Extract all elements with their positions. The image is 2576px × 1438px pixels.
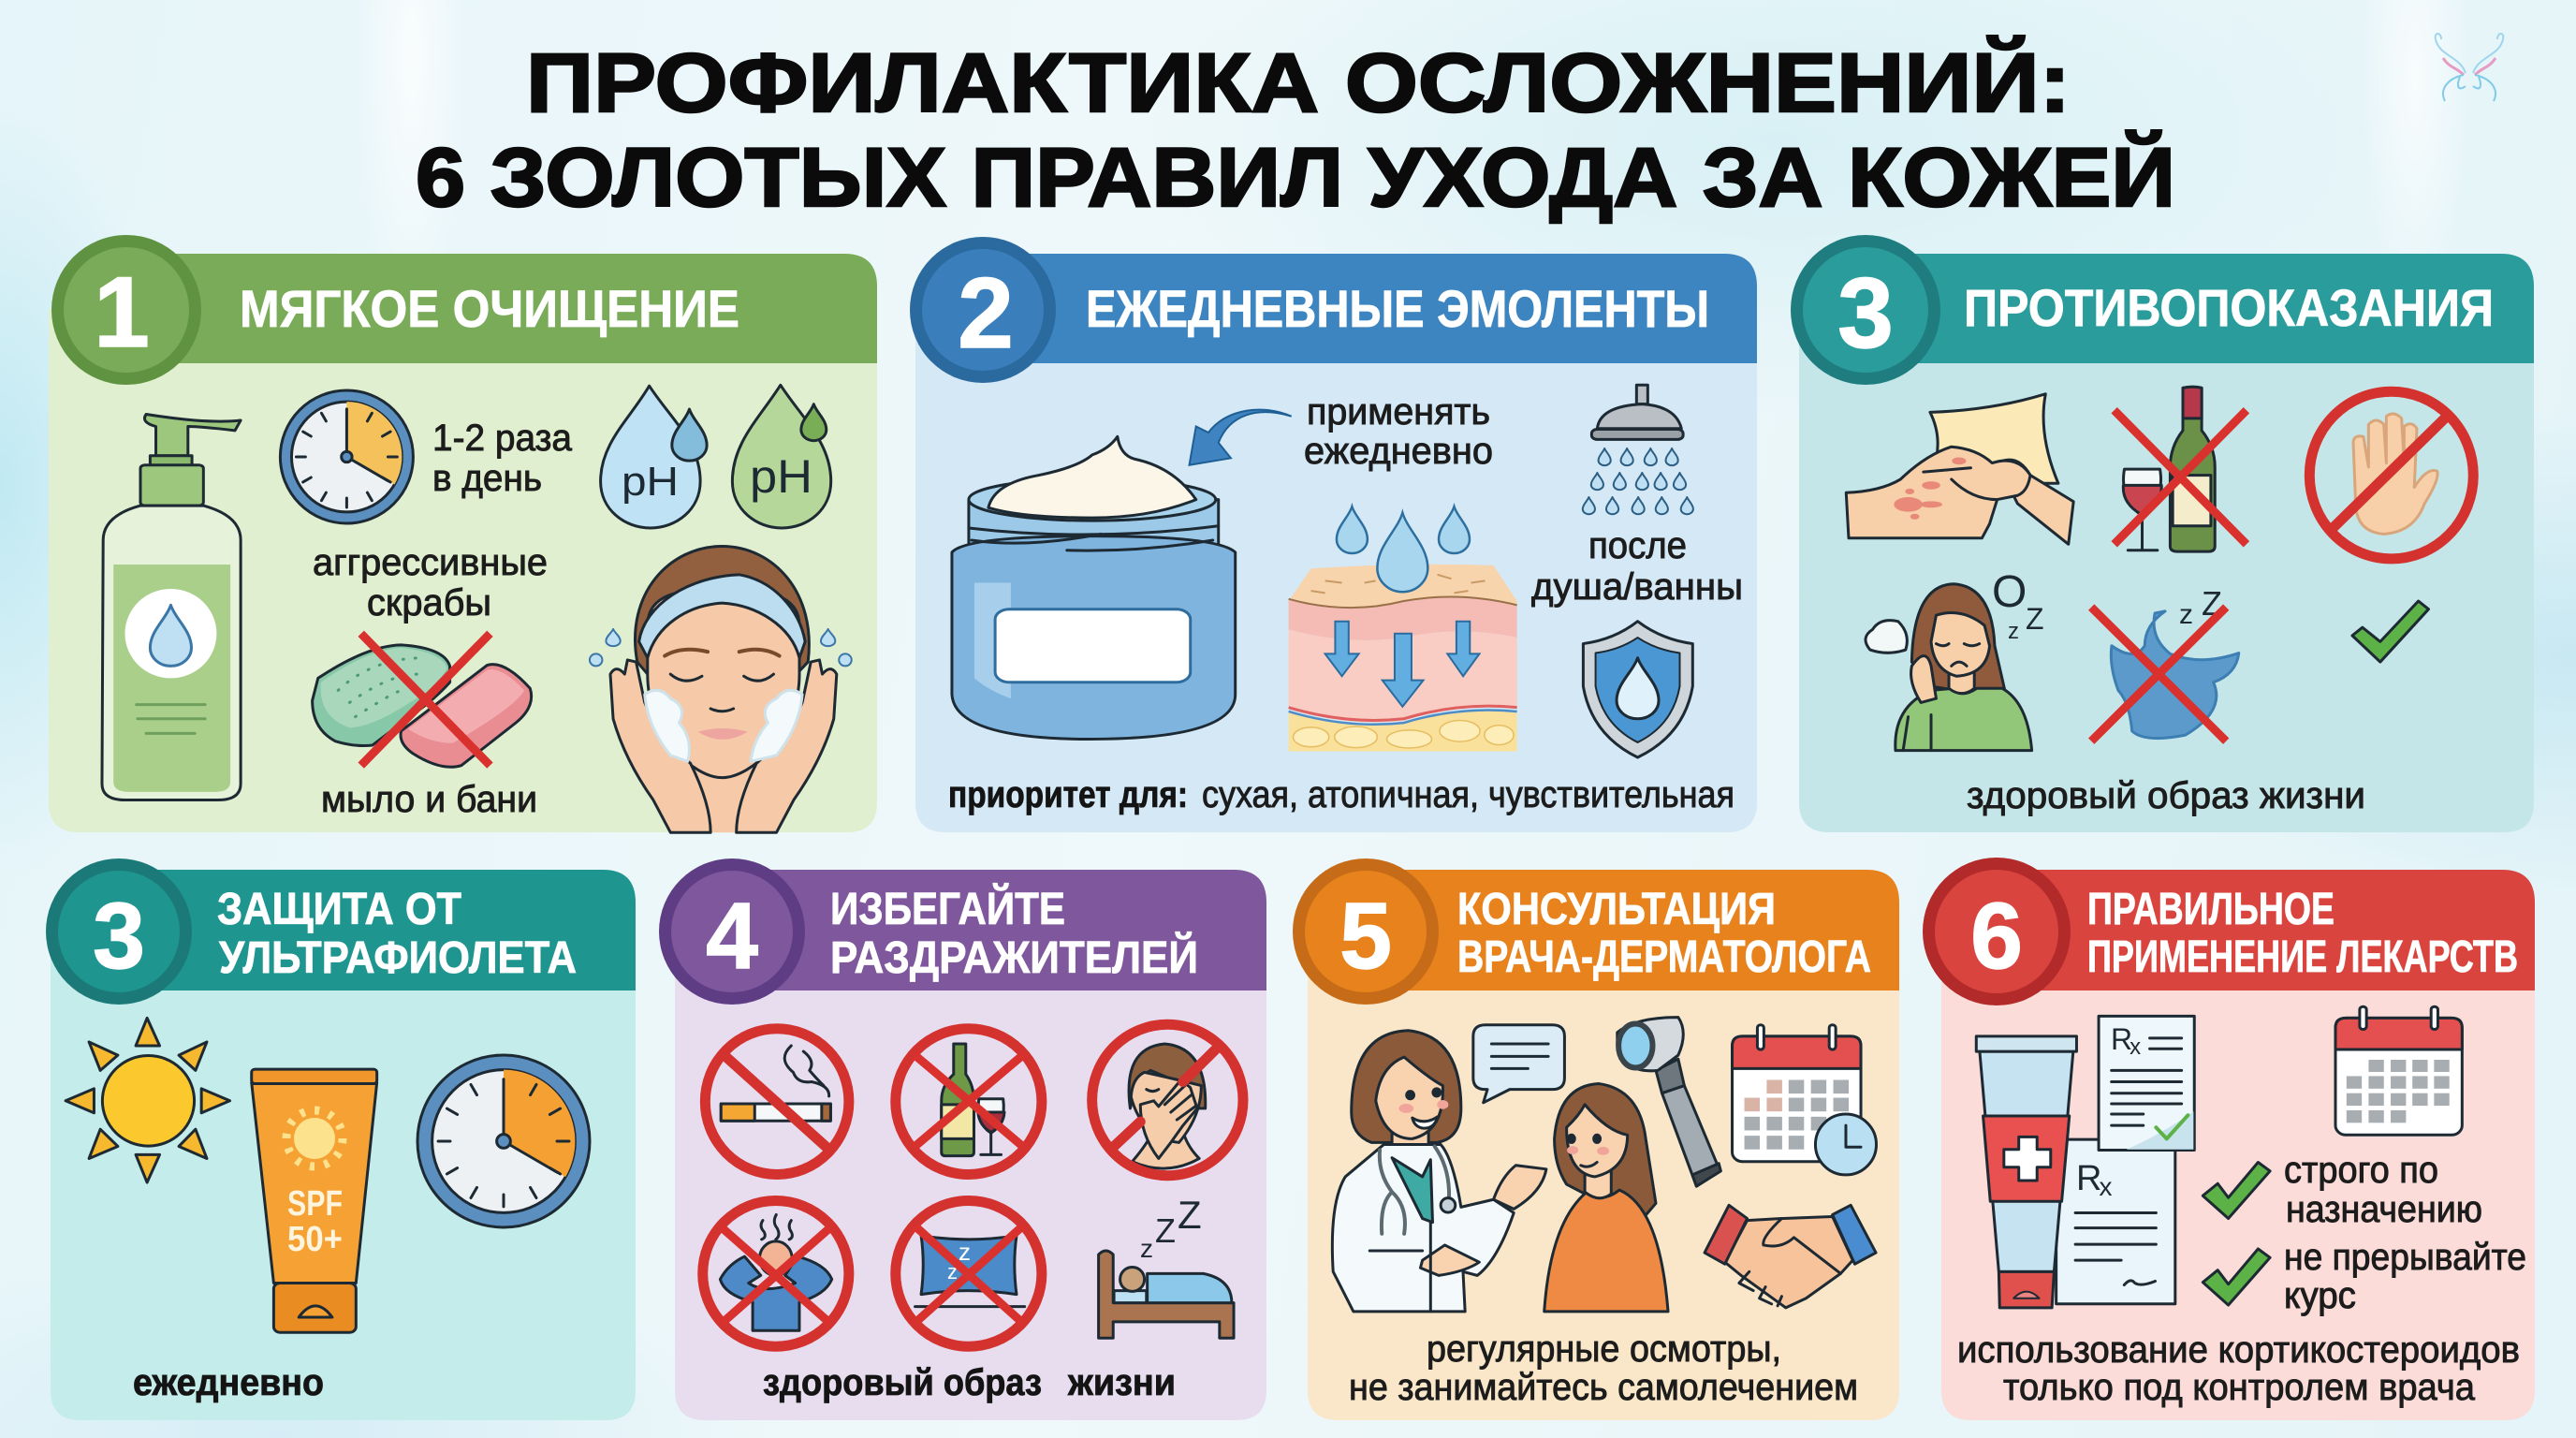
text: corticosteroids: только под контролем врача	[2003, 1367, 2476, 1408]
header bar 1: МЯГКОЕ ОЧИЩЕНИЕ	[240, 279, 739, 338]
icon: doctor	[1332, 1031, 1546, 1312]
icon: shield	[1583, 622, 1692, 757]
icon: sunscreen tube	[252, 1069, 377, 1332]
header bar 6	[1923, 858, 2535, 1005]
icon: no stress	[703, 1200, 849, 1346]
icon: no face touching	[1088, 1020, 1248, 1180]
text: do not interrupt: курс	[2284, 1275, 2356, 1316]
icon: dermatoscope	[1617, 1018, 1720, 1186]
icon: crossed out scrub and soap	[313, 634, 532, 767]
icon: sun	[66, 1018, 230, 1182]
icon: clock orange	[417, 1055, 590, 1227]
icon: sleeping in bed	[1099, 1193, 1234, 1338]
text: as prescribed: назначению	[2286, 1189, 2482, 1230]
header bar 5: ВРАЧА-ДЕРМАТОЛОГА	[1457, 932, 1871, 982]
icon: do not touch	[2309, 391, 2473, 559]
icon: pH drop green: pH	[750, 450, 812, 503]
icon: sleeping in bed: Z	[1178, 1193, 1202, 1237]
icon: no poor sleep	[896, 1200, 1042, 1346]
icon: calendar	[2335, 1006, 2462, 1135]
panel: 3 contraindications	[1791, 235, 2534, 832]
text: apply daily: ежедневно	[1304, 431, 1493, 472]
icon: scratching rash	[1846, 394, 2073, 544]
icon: tired woman: z	[2008, 619, 2019, 644]
text: frequency: 1-2 раза	[432, 418, 573, 459]
header bar 3	[1791, 235, 2534, 385]
panel: 2 daily emollients	[910, 237, 1757, 832]
text: as prescribed	[2284, 1150, 2482, 1230]
header bar 4: РАЗДРАЖИТЕЛЕЙ	[830, 932, 1198, 983]
header bar 2: ЕЖЕДНЕВНЫЕ ЭМОЛЕНТЫ	[1086, 279, 1709, 338]
icon: speech bubble	[1473, 1025, 1564, 1103]
icon: check 2	[2203, 1249, 2270, 1305]
icon: prescriptions: x	[2130, 1034, 2141, 1060]
text: after shower: душа/ванны	[1531, 566, 1743, 608]
text: apply daily	[1304, 391, 1493, 472]
text: healthy lifestyle: здоровый образ жизни	[1967, 775, 2365, 816]
panel: 6 medications	[1923, 858, 2535, 1420]
icon: no poor sleep: z	[947, 1260, 958, 1284]
text: healthy lifestyle 2: здоровый образ	[763, 1362, 1042, 1403]
icon: pH drop blue	[601, 386, 707, 528]
text: do not interrupt: не прерывайте	[2284, 1237, 2526, 1278]
title	[416, 36, 2175, 224]
icon: green check	[2352, 601, 2428, 662]
header bar 4: ИЗБЕГАЙТЕ	[830, 883, 1065, 934]
icon: ointment tube	[1976, 1036, 2076, 1308]
icon: crossed poor sleep	[2091, 584, 2239, 741]
header bar 1	[51, 235, 877, 385]
text: frequency	[432, 418, 573, 499]
icon: prescriptions: R	[2111, 1022, 2132, 1056]
text: corticosteroids: использование кортикостероидов	[1957, 1329, 2520, 1371]
arrow: to jar	[1190, 410, 1292, 465]
text: harsh scrubs: аггрессивные	[313, 542, 548, 583]
text: as prescribed: строго по	[2284, 1150, 2438, 1191]
text: regular checkups: регулярные осмотры,	[1427, 1328, 1781, 1370]
text: soap and baths: мыло и бани	[321, 779, 537, 820]
icon: prescriptions: x	[2099, 1172, 2112, 1201]
icon: skin layers with drops	[1289, 506, 1517, 751]
icon: pump bottle	[102, 415, 241, 800]
header bar 2: 2	[958, 257, 1014, 369]
text: apply daily: применять	[1307, 391, 1490, 433]
panel: UV protection	[46, 858, 636, 1420]
icon: tired woman	[1866, 567, 2044, 751]
text: harsh scrubs	[313, 542, 548, 624]
panel: 4 avoid irritants	[659, 858, 1266, 1420]
icon: handshake	[1705, 1205, 1876, 1308]
icon: crossed alcohol	[2115, 387, 2247, 551]
title: ПРОФИЛАКТИКА ОСЛОЖНЕНИЙ:	[526, 36, 2071, 129]
icon: tired woman: Z	[2026, 602, 2044, 636]
title: 6 ЗОЛОТЫХ ПРАВИЛ УХОДА ЗА КОЖЕЙ	[416, 130, 2175, 224]
text: corticosteroids	[1957, 1329, 2520, 1408]
icon: patient	[1544, 1084, 1668, 1312]
text: priority	[948, 774, 1734, 815]
header bar 5: 5	[1339, 884, 1392, 989]
header bar 6: 6	[1970, 884, 2023, 989]
text: harsh scrubs: скрабы	[367, 582, 491, 624]
icon: shower	[1583, 385, 1693, 514]
icon: clock	[280, 390, 413, 523]
panel: 1 gentle cleansing	[49, 235, 877, 832]
icon: pH drop green	[732, 385, 831, 528]
text: do not interrupt	[2284, 1237, 2526, 1316]
icon: tired woman: O	[1992, 567, 2027, 617]
icon: pH drop blue: pH	[622, 459, 679, 505]
header bar 3: 3	[1837, 257, 1894, 369]
icon: calendar with clock	[1733, 1025, 1877, 1175]
text: priority: сухая, атопичная, чувствительная	[1202, 774, 1734, 815]
header bar 6: ПРАВИЛЬНОЕ	[2087, 885, 2334, 934]
header bar 4	[659, 858, 1266, 1005]
icon: cream jar	[952, 436, 1236, 739]
header bar 3: ПРОТИВОПОКАЗАНИЯ	[1964, 278, 2494, 337]
icon: crossed poor sleep: Z	[2202, 584, 2222, 623]
icon: woman washing face	[590, 546, 852, 832]
icon: butterfly logo	[2436, 34, 2503, 101]
text: after shower	[1531, 525, 1743, 608]
text: regular checkups	[1349, 1328, 1858, 1408]
icon: no alcohol	[896, 1029, 1042, 1174]
header bar 1: 1	[94, 256, 150, 368]
header bar UV	[46, 858, 636, 1005]
icon: sleeping in bed: z	[1140, 1234, 1153, 1263]
text: regular checkups: не занимайтесь самолечением	[1349, 1367, 1858, 1408]
header bar UV: УЛЬТРАФИОЛЕТА	[219, 933, 577, 983]
text: priority: приоритет для:	[948, 774, 1188, 815]
text: frequency: в день	[432, 458, 542, 499]
icon: no smoking	[705, 1029, 849, 1174]
header bar 5: КОНСУЛЬТАЦИЯ	[1457, 885, 1776, 934]
header bar 5	[1293, 858, 1899, 1005]
icon: no poor sleep: z	[959, 1238, 971, 1266]
text: after shower: после	[1588, 525, 1687, 566]
icon: crossed poor sleep: z	[2179, 599, 2193, 630]
icon: check 1	[2203, 1163, 2270, 1219]
header bar UV: ЗАЩИТА ОТ	[217, 885, 461, 934]
header bar 2	[910, 237, 1757, 383]
icon: sleeping in bed: Z	[1155, 1211, 1176, 1250]
icon: prescriptions: R	[2076, 1159, 2101, 1198]
text: daily: ежедневно	[133, 1362, 324, 1403]
icon: prescriptions	[2056, 1016, 2194, 1304]
panel: 5 dermatologist	[1293, 858, 1899, 1420]
icon: sunscreen tube: SPF	[287, 1184, 343, 1224]
text: healthy lifestyle 2: жизни	[1067, 1362, 1176, 1403]
header bar 4: 4	[706, 884, 758, 989]
icon: sunscreen tube: 50+	[287, 1220, 343, 1259]
header bar UV: 3	[93, 884, 145, 989]
